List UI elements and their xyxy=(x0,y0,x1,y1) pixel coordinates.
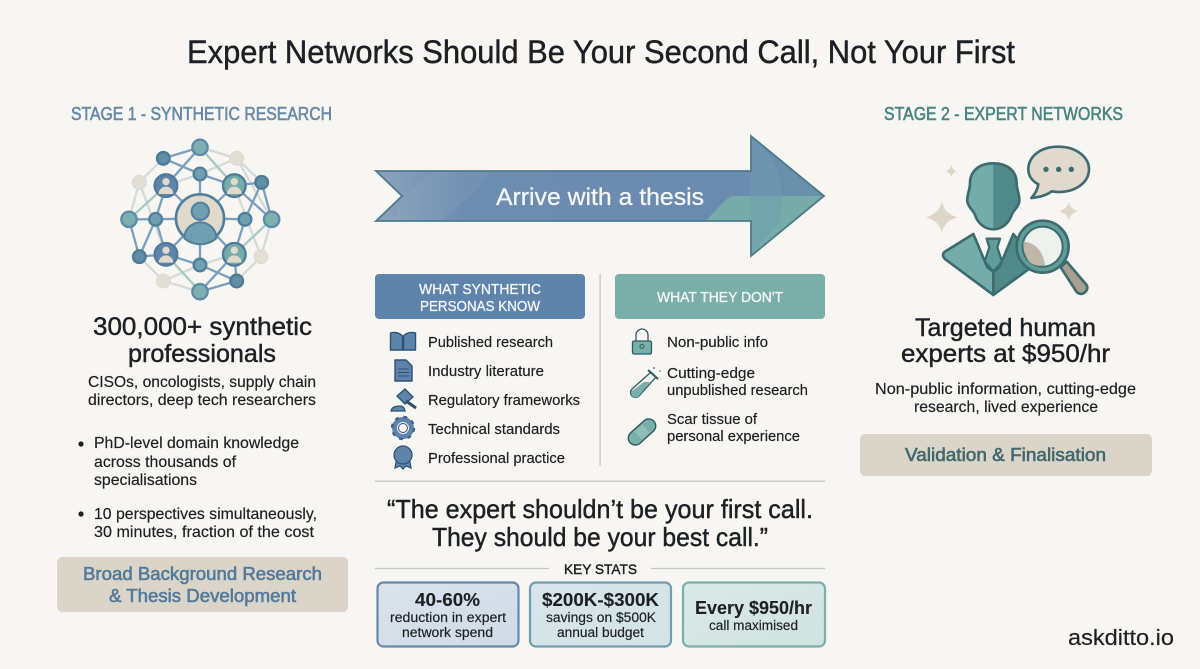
arrow label: Arrive with a thesis xyxy=(496,184,704,211)
stage 2 heading: STAGE 2 - EXPERT NETWORKS xyxy=(884,103,1123,124)
icon: bandage xyxy=(625,416,659,448)
description xyxy=(875,381,1136,416)
item: Professional practice xyxy=(428,450,565,467)
description: research, lived experience xyxy=(914,399,1098,416)
stat card: savings: savings on $500K xyxy=(546,610,656,625)
stat card: 40-60% xyxy=(378,582,518,646)
item xyxy=(667,365,808,399)
description: CISOs, oncologists, supply chain xyxy=(88,374,316,391)
brand: askditto.io: askditto.io xyxy=(1068,625,1174,650)
quote: “The expert shouldn’t be your first call. xyxy=(387,494,813,524)
arrow: arrive with a thesis xyxy=(376,136,824,256)
stat card: every $950/hr: call maximised xyxy=(709,618,798,633)
icon: test tube xyxy=(631,367,661,398)
headline: 300,000+ synthetic professionals: professionals xyxy=(128,340,276,368)
panel: stage 1 synthetic research xyxy=(57,103,348,612)
bullet list: 10 perspectives simultaneously, xyxy=(94,506,317,523)
stage 1 heading: STAGE 1 - SYNTHETIC RESEARCH xyxy=(71,103,332,124)
sparkles xyxy=(926,165,1078,233)
tag: broad background research xyxy=(57,557,348,612)
headline: targeted human experts: Targeted human xyxy=(915,314,1096,342)
icon: padlock xyxy=(632,329,652,354)
icon: persona network xyxy=(121,140,279,299)
bullet list: PhD-level domain knowledge xyxy=(94,435,299,452)
key stats xyxy=(375,561,825,646)
bullet list: 30 minutes, fraction of the cost xyxy=(94,524,315,541)
item xyxy=(667,411,800,445)
icon: gavel xyxy=(391,389,416,411)
item: Non-public info xyxy=(667,334,768,351)
panel: what synthetic personas know xyxy=(375,274,585,469)
key stats heading: KEY STATS xyxy=(564,561,637,577)
panel: what they don't xyxy=(615,274,825,448)
body xyxy=(943,234,993,295)
magnifier xyxy=(1061,262,1087,294)
headline: 300,000+ synthetic professionals xyxy=(93,313,312,368)
tag: validation and finalisation xyxy=(860,434,1152,476)
item: Technical standards xyxy=(428,421,560,438)
header: WHAT SYNTHETIC xyxy=(419,282,541,298)
headline: targeted human experts: experts at $950/hr xyxy=(901,340,1110,368)
small avatars xyxy=(155,174,246,266)
bullet list xyxy=(78,435,317,541)
head xyxy=(967,163,1019,229)
item: Industry literature xyxy=(428,363,544,380)
icon: award ribbon xyxy=(394,446,412,469)
header xyxy=(375,274,585,319)
speech bubble xyxy=(1028,147,1089,198)
panel: stage 2 expert networks xyxy=(860,103,1152,476)
stat card: 40-60%: network spend xyxy=(402,625,493,640)
tag: broad background research: & Thesis Development xyxy=(109,585,296,606)
item: unpublished research xyxy=(667,382,808,399)
header: WHAT THEY DON'T xyxy=(657,290,783,306)
headline: targeted human experts xyxy=(901,314,1110,368)
stat card: savings: $200K-$300K xyxy=(542,590,659,610)
headline: 300,000+ synthetic professionals: 300,000+ synthetic xyxy=(93,313,312,341)
tag: broad background research: Broad Background Research xyxy=(83,563,322,584)
stat card: every $950/hr xyxy=(683,582,825,646)
central avatar xyxy=(176,194,224,242)
quote: They should be your best call.” xyxy=(432,522,768,552)
icon: document xyxy=(395,360,412,381)
description: Non-public information, cutting-edge xyxy=(875,381,1136,398)
item: Cutting-edge xyxy=(667,365,755,382)
stat card: 40-60%: reduction in expert xyxy=(390,610,506,625)
tag: validation and finalisation: Validation & Finalisation xyxy=(905,444,1106,465)
item: Published research xyxy=(428,334,553,351)
icon: expert with magnifier and speech bubble xyxy=(926,147,1089,295)
description xyxy=(88,374,316,409)
outer nodes xyxy=(121,140,279,299)
stat card: savings: annual budget xyxy=(557,625,644,640)
item: Regulatory frameworks xyxy=(428,392,580,409)
stat card: 40-60%: 40-60% xyxy=(415,590,480,610)
description: directors, deep tech researchers xyxy=(88,392,316,409)
bullet list: specialisations xyxy=(94,472,197,489)
item: personal experience xyxy=(667,428,800,445)
icon: book xyxy=(390,332,416,350)
quote xyxy=(387,494,813,552)
stat card: every $950/hr: Every $950/hr xyxy=(695,598,812,618)
header: PERSONAS KNOW xyxy=(420,299,540,315)
stat card: savings xyxy=(530,582,671,646)
header xyxy=(615,274,825,319)
bullet list: across thousands of xyxy=(94,454,237,471)
title: Expert Networks Should Be Your Second Call, Not Your First xyxy=(187,34,1015,70)
icon: gear xyxy=(392,417,414,439)
item: Scar tissue of xyxy=(667,411,758,428)
